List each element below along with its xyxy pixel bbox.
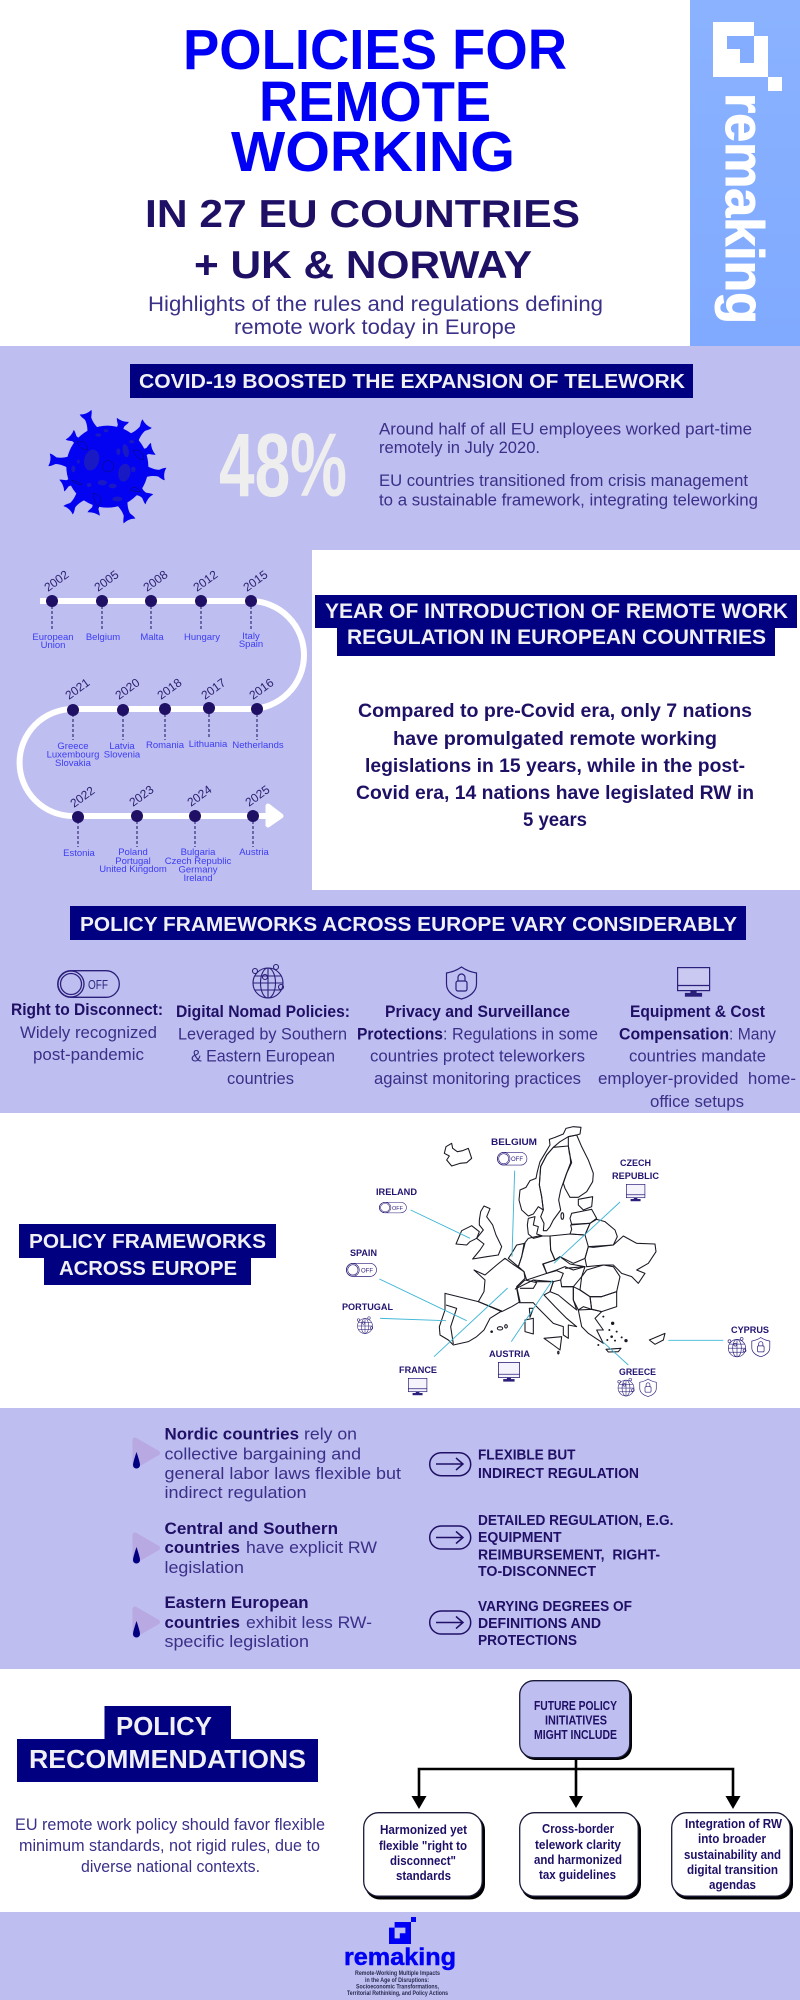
text: detailed regulation: EQUIPMENT	[478, 1530, 562, 1546]
heading: policy frameworks across europe: POLICY FRAMEWORKS	[29, 1231, 266, 1253]
timeline country labels: Netherlands	[232, 740, 284, 751]
text block: recommendation: EU remote work policy should favor flexible	[15, 1815, 325, 1834]
timeline years: 2008	[141, 567, 171, 594]
box: harmonized	[364, 1813, 485, 1900]
text block: covid facts: remotely in July 2020.	[379, 439, 540, 457]
timeline years: 2015	[241, 567, 271, 594]
icon: bullet	[133, 1440, 158, 1468]
timeline country labels	[32, 631, 284, 884]
title: POLICIES FOR	[183, 18, 567, 82]
map callout: spain: OFF	[361, 1268, 373, 1274]
box: integration: digital transition	[687, 1862, 778, 1877]
text: equipment compensation: Compensation	[619, 1026, 729, 1044]
box: harmonized: disconnect"	[390, 1853, 456, 1868]
map callout: belgium	[491, 1137, 537, 1165]
heading: year of introduction: YEAR OF INTRODUCTION OF REMOTE WORK	[325, 600, 788, 623]
map callout: czech republic	[612, 1158, 659, 1201]
footer project text: Remote-Working Multiple Impacts	[355, 1970, 440, 1977]
panel: equipment	[598, 968, 796, 1111]
heading: covid: COVID-19 BOOSTED THE EXPANSION OF TELEWORK	[139, 371, 686, 393]
map callout: cyprus	[728, 1325, 770, 1357]
box: integration	[672, 1813, 793, 1900]
text: digital nomad policies: & Eastern European	[191, 1048, 335, 1066]
text: privacy protections: countries protect teleworkers	[370, 1048, 585, 1066]
timeline country labels: United Kingdom	[99, 864, 167, 875]
text: equipment compensation: employer-provided home-	[598, 1070, 796, 1088]
heading: policy frameworks across europe	[19, 1224, 276, 1285]
text: varying degrees	[478, 1599, 632, 1649]
box: integration: into broader	[698, 1831, 766, 1846]
icon: arrow pill	[430, 1453, 471, 1476]
map callout: czech republic: CZECH	[620, 1158, 651, 1169]
map callout: austria	[489, 1349, 530, 1381]
box: future policy	[520, 1681, 632, 1760]
panel: digital nomad	[176, 964, 350, 1088]
timeline country labels: Austria	[239, 847, 269, 858]
text block: recommendation: diverse national contexts.	[81, 1857, 260, 1876]
panel: header	[145, 0, 800, 346]
text: detailed regulation: TO-DISCONNECT	[478, 1564, 596, 1580]
icon: off toggle	[58, 971, 119, 997]
timeline years: 2020	[113, 675, 143, 702]
text: varying degrees: DEFINITIONS AND	[478, 1616, 601, 1632]
icon: footer logo mark	[389, 1917, 416, 1944]
text: right to disconnect: Widely recognized	[20, 1024, 157, 1042]
footer project text: in the Age of Disruptions:	[365, 1977, 429, 1984]
map callout: spain: SPAIN	[350, 1248, 377, 1259]
timeline country labels: Portugal	[115, 856, 151, 867]
text block: comparison: have promulgated remote working	[393, 729, 717, 750]
timeline country labels: Slovenia	[104, 750, 141, 760]
text: nordic: rely on	[304, 1424, 357, 1444]
timeline country labels: European	[32, 632, 74, 643]
text: nordic: collective bargaining and	[164, 1444, 361, 1464]
text: central and southern: have explicit RW	[246, 1538, 377, 1557]
text block: covid facts: EU countries transitioned from crisis management	[379, 472, 748, 490]
intro text	[148, 293, 603, 339]
text: digital nomad policies: Digital Nomad Policies:	[176, 1003, 350, 1021]
arrows: connectors	[412, 1759, 740, 1809]
text: privacy protections	[357, 1003, 598, 1088]
box: harmonized: Harmonized yet	[380, 1822, 468, 1837]
timeline country labels: Union	[41, 640, 65, 651]
text: central and southern	[164, 1519, 377, 1577]
timeline path	[20, 601, 304, 816]
box: cross-border: telework clarity	[535, 1837, 622, 1852]
map callout: spain	[346, 1248, 377, 1276]
icon: arrow pill	[430, 1526, 471, 1549]
timeline country labels: Bulgaria	[181, 847, 216, 858]
timeline country labels: Estonia	[63, 848, 96, 859]
timeline years: 2002	[42, 567, 72, 594]
footer project text: Territorial Rethinking, and Policy Actions	[347, 1990, 448, 1997]
text: privacy protections: : Regulations in some	[443, 1026, 598, 1044]
text: central and southern: legislation	[164, 1558, 244, 1577]
timeline years: 2021	[63, 675, 93, 702]
timeline years: 2024	[185, 782, 215, 809]
map callout: greece: GREECE	[619, 1367, 656, 1378]
box: harmonized: standards	[396, 1868, 451, 1883]
icon: monitor	[678, 968, 710, 996]
timeline years: 2023	[127, 782, 157, 809]
box: cross-border: and harmonized	[534, 1852, 622, 1867]
heading: covid	[130, 364, 693, 398]
timeline country labels: Poland	[118, 847, 148, 858]
box: future policy: INITIATIVES	[545, 1714, 607, 1728]
panel: blue logo strip	[690, 0, 800, 346]
timeline years	[42, 567, 277, 810]
intro text: remote work today in Europe	[234, 316, 516, 339]
text: digital nomad policies: countries	[227, 1070, 294, 1088]
heading: policy recommendations: POLICY	[116, 1711, 212, 1741]
timeline country labels: Luxembourg	[47, 750, 99, 760]
icon: off toggle: OFF	[88, 977, 108, 992]
panel: regional comparison	[0, 1408, 800, 1669]
text: right to disconnect	[11, 1001, 163, 1064]
text: eastern european: Eastern European	[164, 1593, 308, 1612]
icon: shield	[446, 967, 476, 999]
timeline country labels: Malta	[140, 632, 164, 643]
text: eastern european	[164, 1593, 372, 1651]
timeline arrowhead	[268, 806, 281, 825]
timeline country labels: Ireland	[183, 873, 213, 884]
box: cross-border: Cross-border	[542, 1821, 614, 1836]
heading: policy frameworks vary: POLICY FRAMEWORKS ACROSS EUROPE VARY CONSIDERABLY	[80, 914, 738, 936]
panel: privacy	[357, 967, 598, 1088]
map of europe	[379, 1127, 723, 1365]
text block: covid facts	[379, 420, 758, 510]
box: cross-border	[520, 1813, 641, 1900]
timeline country labels: Spain	[239, 639, 263, 650]
map callout: ireland: OFF	[392, 1206, 404, 1212]
text block: recommendation	[15, 1815, 325, 1876]
icon: bullet	[133, 1609, 158, 1638]
heading: policy frameworks across europe: ACROSS EUROPE	[59, 1258, 237, 1280]
text: privacy protections: Privacy and Surveillance	[385, 1003, 570, 1021]
panel: white timeline explanation	[312, 550, 800, 890]
map callout: cyprus: CYPRUS	[731, 1325, 769, 1336]
text block: recommendation: minimum standards, not rigid rules, due to	[19, 1836, 320, 1855]
subtitle: countries	[145, 193, 580, 287]
timeline country labels: Belgium	[86, 632, 120, 643]
map callout: portugal	[342, 1302, 393, 1334]
icon: virus	[48, 409, 167, 524]
footer project text: Socioeconomic Transformations,	[356, 1984, 439, 1990]
heading: policy frameworks vary	[70, 906, 746, 940]
title: REMOTE	[259, 70, 491, 134]
text: equipment compensation: countries mandate	[629, 1048, 766, 1066]
text block: comparison: legislations in 15 years, while in the post-	[365, 756, 745, 777]
timeline country labels: Greece	[57, 741, 89, 752]
text: digital nomad policies: Leveraged by Southern	[178, 1026, 347, 1044]
heading: year of introduction	[315, 595, 797, 656]
heading: policy recommendations: RECOMMENDATIONS	[29, 1744, 306, 1774]
heading: year of introduction: REGULATION IN EUROPEAN COUNTRIES	[347, 626, 766, 649]
box: integration: agendas	[709, 1877, 756, 1892]
timeline country labels: Italy	[242, 631, 260, 642]
text: nordic: indirect regulation	[164, 1483, 306, 1502]
timeline years: 2022	[68, 783, 98, 810]
text: nordic: Nordic countries	[164, 1424, 299, 1444]
text: detailed regulation: REIMBURSEMENT, RIGHT-	[478, 1548, 660, 1564]
text: eastern european: countries	[164, 1613, 240, 1632]
big number: 48%: 48%	[219, 416, 347, 516]
text: flexible: INDIRECT REGULATION	[478, 1466, 639, 1482]
text block: covid facts: to a sustainable framework, integrating teleworking	[379, 492, 758, 510]
map callout: czech republic: REPUBLIC	[612, 1171, 659, 1182]
text: varying degrees: PROTECTIONS	[478, 1633, 577, 1649]
timeline country labels: Latvia	[109, 741, 135, 752]
row: central and southern	[133, 1513, 674, 1580]
text: central and southern: Central and Southern	[164, 1519, 338, 1538]
text: nordic	[164, 1424, 401, 1502]
text: right to disconnect: post-pandemic	[33, 1046, 144, 1064]
timeline country labels: Czech Republic	[165, 856, 232, 867]
box: cross-border: tax guidelines	[539, 1867, 616, 1882]
heading: policy recommendations	[17, 1706, 318, 1782]
title	[183, 18, 567, 184]
timeline years: 2012	[191, 567, 221, 594]
row: nordic countries	[133, 1424, 639, 1502]
text block: comparison: Covid era, 14 nations have legislated RW in	[356, 783, 754, 804]
text: flexible: FLEXIBLE BUT	[478, 1448, 576, 1464]
map callout: france: FRANCE	[399, 1365, 437, 1376]
subtitle: countries: + UK & NORWAY	[194, 244, 532, 287]
panel: lavender upper section	[0, 346, 800, 1113]
intro text: Highlights of the rules and regulations defining	[148, 293, 603, 316]
icon: globe	[252, 964, 284, 998]
timeline dashes	[52, 601, 257, 847]
timeline years: 2025	[243, 782, 273, 809]
text: detailed regulation	[478, 1513, 674, 1580]
timeline years: 2017	[199, 675, 229, 702]
panel: footer	[0, 1912, 800, 2000]
logo wordmark: remaking	[714, 93, 774, 324]
text: varying degrees: VARYING DEGREES OF	[478, 1599, 632, 1615]
map callout: portugal: PORTUGAL	[342, 1302, 393, 1313]
map callout: ireland	[376, 1187, 417, 1213]
timeline years: 2018	[155, 675, 185, 702]
text: eastern european: specific legislation	[164, 1632, 309, 1651]
text: detailed regulation: DETAILED REGULATION, E.G.	[478, 1513, 674, 1529]
box: future policy: FUTURE POLICY	[534, 1699, 618, 1713]
title: WORKING	[231, 120, 515, 184]
icon: remaking logo mark	[713, 22, 782, 91]
timeline years: 2005	[92, 567, 122, 594]
panel: right to disconnect	[11, 971, 163, 1064]
text: digital nomad policies	[176, 1003, 350, 1088]
timeline country labels: Hungary	[184, 632, 220, 643]
text: equipment compensation: office setups	[650, 1093, 744, 1111]
text block: comparison: Compared to pre-Covid era, only 7 nations	[358, 701, 752, 722]
box: harmonized: flexible "right to	[379, 1838, 467, 1853]
icon: arrow pill	[430, 1611, 471, 1634]
map callout: france	[399, 1365, 437, 1395]
text: privacy protections: against monitoring practices	[374, 1070, 581, 1088]
flowchart: future policy initiatives	[364, 1681, 793, 1900]
text: equipment compensation	[598, 1003, 796, 1111]
icon: bullet	[133, 1535, 158, 1564]
text: privacy protections: Protections	[357, 1026, 443, 1044]
timeline dots	[46, 595, 263, 823]
map callout: austria: AUSTRIA	[489, 1349, 530, 1360]
text: flexible	[478, 1448, 639, 1482]
text block: covid facts: Around half of all EU employees worked part-time	[379, 420, 752, 438]
text block: comparison	[356, 701, 754, 831]
map callout: belgium: BELGIUM	[491, 1137, 537, 1148]
timeline country labels: Romania	[146, 740, 185, 751]
box: future policy: MIGHT INCLUDE	[534, 1728, 617, 1742]
timeline years: 2016	[247, 675, 277, 702]
text: nordic: general labor laws flexible but	[164, 1464, 401, 1483]
footer project text	[347, 1970, 448, 1997]
map callout: greece	[618, 1367, 656, 1397]
text: central and southern: countries	[164, 1538, 240, 1557]
timeline country labels: Lithuania	[189, 739, 228, 750]
map callout: ireland: IRELAND	[376, 1187, 417, 1198]
subtitle: countries: IN 27 EU COUNTRIES	[145, 193, 580, 236]
text block: comparison: 5 years	[523, 810, 587, 831]
timeline country labels: Germany	[178, 864, 218, 876]
text: eastern european: exhibit less RW-	[246, 1613, 372, 1632]
timeline chart	[20, 567, 304, 884]
row: eastern european	[133, 1593, 632, 1651]
footer wordmark: remaking	[344, 1944, 456, 1971]
box: integration: Integration of RW	[685, 1816, 783, 1831]
text: equipment compensation: : Many	[729, 1026, 777, 1044]
box: integration: sustainability and	[684, 1847, 781, 1862]
text: right to disconnect: Right to Disconnect:	[11, 1001, 163, 1019]
map callout: belgium: OFF	[511, 1157, 523, 1163]
timeline country labels: Slovakia	[55, 758, 92, 769]
text: equipment compensation: Equipment & Cost	[630, 1003, 765, 1021]
